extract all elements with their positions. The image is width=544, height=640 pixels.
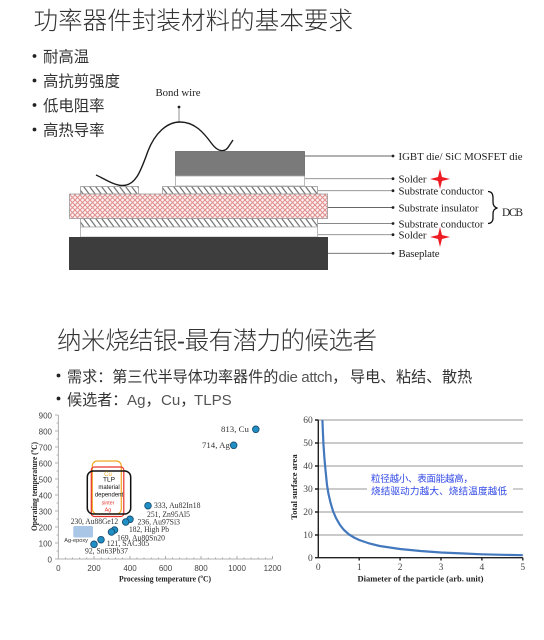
axis title: total surface area: Total surface area xyxy=(289,454,299,520)
x tick labels: 1 xyxy=(357,563,362,573)
x tick labels xyxy=(56,564,282,573)
layer: baseplate xyxy=(69,237,328,270)
bond wire curve xyxy=(96,122,233,186)
data labels: 236, Au97Si3 xyxy=(138,516,181,526)
bullet list: basic requirements: 耐高温 xyxy=(43,48,89,66)
layer labels: IGBT die/ SiC MOSFET die xyxy=(398,151,523,163)
layer: right top conductor xyxy=(162,186,318,194)
bullet list: requirement and candidates: ， xyxy=(180,392,195,409)
y tick labels xyxy=(303,416,313,564)
layer: left top conductor xyxy=(80,186,138,194)
bullet list: requirement and candidates: 散热 xyxy=(442,369,472,386)
y tick labels: 400 xyxy=(39,492,53,500)
bullet list: requirement and candidates: 需求：第三代半导体功率器件的 xyxy=(67,369,278,386)
bullet list: requirement and candidates: ， xyxy=(145,392,161,409)
bullet list: requirement and candidates xyxy=(57,368,472,409)
curve: surface area xyxy=(322,420,523,555)
leader dots xyxy=(392,155,394,255)
axis title: operating temperature: Operating temperature (ºC) xyxy=(29,442,39,531)
diagram: power module cross-section xyxy=(69,87,523,270)
layer labels: Solder xyxy=(398,174,427,186)
y tick labels: 0 xyxy=(48,556,53,564)
bullet list: basic requirements xyxy=(33,48,120,140)
icon: red star, top solder xyxy=(430,169,450,189)
layer: bottom conductor xyxy=(80,218,318,227)
y tick labels: 30 xyxy=(303,485,313,495)
layer: die xyxy=(176,152,304,176)
data labels: 92, Sn63Pb37 xyxy=(85,546,129,556)
region labels: TLP xyxy=(103,476,115,484)
y tick labels: 800 xyxy=(39,428,53,436)
grid lines xyxy=(318,420,523,535)
data labels: 182, High Pb xyxy=(129,524,170,534)
label: DCB: DCB xyxy=(502,207,523,219)
bullet list: requirement and candidates: Ag xyxy=(127,392,145,409)
data labels: 251, Zn95Al5 xyxy=(147,509,191,519)
title: power device packaging material requirements: 功率器件封装材料的基本要求 xyxy=(34,7,353,35)
layer labels: Solder xyxy=(398,230,427,242)
leader lines xyxy=(305,156,393,253)
axis title: processing temperature: Processing temperature (ºC) xyxy=(119,574,211,584)
icon: red star, bottom solder xyxy=(430,227,450,247)
region labels: Ag xyxy=(105,508,111,514)
y tick labels: 600 xyxy=(39,460,53,468)
y tick labels: 700 xyxy=(39,444,53,452)
y tick labels: 200 xyxy=(39,524,53,532)
data labels: 333, Au82In18 xyxy=(154,500,201,510)
annotation: particle size effect: 烧结驱动力越大、烧结温度越低 xyxy=(371,486,507,498)
y tick labels: 900 xyxy=(39,412,53,420)
bullet list: basic requirements: 低电阻率 xyxy=(43,97,105,115)
region: TLP outline xyxy=(87,471,131,514)
chart: operating vs processing temperature scatter xyxy=(29,412,282,584)
layer labels xyxy=(398,151,523,260)
x tick labels: 3 xyxy=(439,563,444,573)
region labels xyxy=(95,472,124,514)
bullet list: requirement and candidates: Cu xyxy=(161,392,180,409)
layer: top solder xyxy=(176,176,304,186)
x tick labels: 0 xyxy=(316,563,321,573)
x tick labels: 4 xyxy=(480,563,485,573)
data labels: 813, Cu xyxy=(221,424,249,434)
x tick labels: 1000 xyxy=(228,564,246,573)
data labels: 714, Ag xyxy=(202,440,230,450)
subtitle: nano sintered silver: 纳米烧结银-最有潜力的候选者 xyxy=(57,327,377,355)
x tick labels: 0 xyxy=(56,564,61,573)
label: Ag-epoxy: Ag-epoxy xyxy=(64,538,88,544)
data labels xyxy=(71,424,249,556)
chart: total surface area vs particle diameter xyxy=(289,416,525,584)
y tick labels: 100 xyxy=(39,540,53,548)
bullet list: requirement and candidates: 粘结、 xyxy=(396,369,441,386)
x tick labels: 800 xyxy=(194,564,208,573)
data points xyxy=(91,426,259,548)
label: bond wire xyxy=(156,87,201,122)
x tick labels: 5 xyxy=(520,563,525,573)
y tick labels: 300 xyxy=(39,508,53,516)
region labels: sinter xyxy=(102,500,115,506)
layer labels: Substrate insulator xyxy=(398,202,479,214)
y tick labels: 0 xyxy=(308,554,313,564)
layer labels: Baseplate xyxy=(398,248,440,260)
x tick labels: 2 xyxy=(398,563,403,573)
axes and ticks xyxy=(55,415,272,559)
data labels: 169, Au80Sn20 xyxy=(117,532,166,542)
y tick labels: 500 xyxy=(39,476,53,484)
y tick labels: 50 xyxy=(303,439,313,449)
region: Cu sinter outline xyxy=(92,461,121,514)
annotation: particle size effect: 粒径越小、表面能越高， xyxy=(371,473,473,485)
annotation: particle size effect xyxy=(371,473,507,498)
region labels: material xyxy=(98,485,120,491)
y tick labels: 10 xyxy=(303,531,313,541)
y tick labels: 40 xyxy=(303,462,313,472)
x tick labels xyxy=(316,563,525,573)
brace: DCB group xyxy=(488,192,498,224)
layer labels: Substrate conductor xyxy=(398,218,484,230)
bullet list: basic requirements: 高热导率 xyxy=(43,122,105,140)
axes xyxy=(315,420,523,560)
data labels: 121, SAC305 xyxy=(107,538,150,548)
bullet list: basic requirements: 高抗剪强度 xyxy=(43,72,120,90)
region: Ag sinter outline xyxy=(91,467,124,516)
region labels: dependent xyxy=(95,492,124,498)
x tick labels: 600 xyxy=(159,564,173,573)
x tick labels: 1200 xyxy=(264,564,282,573)
label: bond wire: Bond wire xyxy=(156,87,201,99)
axis title: diameter: Diameter of the particle (arb. unit) xyxy=(358,574,484,584)
x tick labels: 200 xyxy=(87,564,101,573)
layer: insulator xyxy=(70,194,328,218)
Ag-epoxy region xyxy=(73,526,93,538)
y tick labels xyxy=(39,412,53,564)
y tick labels: 60 xyxy=(303,416,313,426)
bullet list: requirement and candidates: ， xyxy=(332,369,347,386)
bullet list: requirement and candidates: 候选者： xyxy=(67,392,127,409)
bullet list: requirement and candidates: die attch xyxy=(278,369,332,386)
bullet list: requirement and candidates: 导电、 xyxy=(350,369,395,386)
data labels: 230, Au88Ge12 xyxy=(71,516,118,526)
layer labels: Substrate conductor xyxy=(398,186,484,198)
bullet list: requirement and candidates: TLPS xyxy=(194,392,232,409)
region labels: Cu xyxy=(104,472,112,478)
x tick labels: 400 xyxy=(123,564,137,573)
layer: bottom solder xyxy=(80,227,318,237)
y tick labels: 20 xyxy=(303,508,313,518)
